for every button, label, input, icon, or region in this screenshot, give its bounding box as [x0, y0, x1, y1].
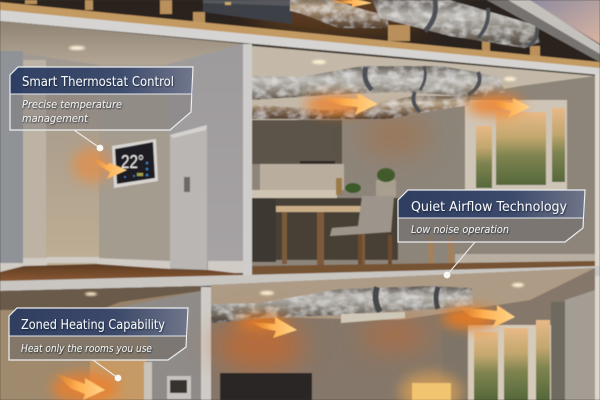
door frame [144, 362, 152, 400]
left wall [0, 51, 23, 273]
kitchen range hood shade [300, 161, 335, 164]
lower floor slab [0, 266, 600, 291]
floor [252, 261, 595, 276]
callout outline [9, 308, 188, 360]
callout: Smart Thermostat Control [10, 67, 193, 151]
duct band [420, 66, 425, 90]
door [170, 125, 207, 270]
duct [211, 286, 473, 323]
panel: lower left room [0, 286, 201, 400]
duct band [436, 287, 438, 309]
callout divider [9, 335, 187, 337]
callout header [9, 308, 188, 336]
dining area shade [276, 198, 398, 260]
leader line [447, 242, 475, 275]
thermostat indicators [124, 162, 148, 178]
duct band [468, 72, 480, 95]
column [23, 60, 46, 265]
callout description: Heat only the rooms you use [21, 343, 152, 355]
thermostat glow [72, 147, 112, 183]
floor deck: upper wood [0, 2, 600, 72]
callout description: Low noise operation [411, 224, 509, 236]
panel: upper right room [252, 46, 595, 276]
duct band [365, 67, 372, 90]
ceiling lights [260, 283, 524, 295]
duct band [425, 0, 436, 31]
attic joists [25, 0, 540, 56]
warm back wall [46, 65, 99, 265]
attic warm glow [250, 0, 430, 34]
baseboards [0, 257, 244, 273]
callout title: Zoned Heating Capability [21, 318, 165, 333]
callout outline [398, 190, 585, 242]
duct: upper run [252, 66, 505, 100]
leader line [93, 360, 118, 378]
arrow: lower duct airflow right [457, 305, 515, 328]
icon: potted plant [336, 168, 396, 197]
duct band [478, 8, 488, 38]
upper floor column [243, 44, 252, 276]
panel: lower right room [211, 268, 595, 400]
right wall [565, 290, 595, 400]
warm air plume [360, 319, 430, 351]
arrow: thermostat airflow [90, 155, 127, 179]
door warm panel [90, 360, 146, 400]
duct: lower run [252, 96, 470, 119]
arrow: upper duct airflow left [320, 93, 378, 115]
warm glow [467, 94, 523, 116]
kitchen backsplash [260, 164, 344, 190]
leader line [74, 130, 100, 148]
curtain right [551, 302, 565, 400]
callout body [10, 94, 193, 130]
callout title: Quiet Airflow Technology [411, 200, 567, 215]
ceiling light [85, 292, 97, 296]
leader dot [444, 272, 450, 278]
warm glow [305, 95, 365, 115]
warm glow [442, 307, 498, 329]
ceiling [0, 21, 243, 65]
kitchen wall cabinets [252, 120, 342, 164]
roof rafter shade [487, 0, 600, 62]
side wall [95, 291, 201, 400]
lower floor column [201, 287, 211, 400]
attic duct centre [290, 0, 388, 28]
upper beam [0, 10, 600, 75]
ceiling air vent [341, 312, 405, 323]
callout divider [10, 93, 192, 95]
callout body [9, 336, 188, 360]
callout header [398, 190, 585, 218]
curtain left [442, 330, 466, 400]
ceiling lights [312, 60, 516, 81]
thermostat temperature: 22° [121, 152, 144, 172]
warm textured wall [0, 310, 148, 400]
floor lamp [399, 372, 463, 400]
arrow: upper duct airflow right [490, 98, 530, 118]
attic duct far left [30, 0, 85, 6]
leader dot [97, 145, 103, 151]
warm air plume [215, 319, 305, 371]
callout description second line: management [22, 113, 89, 125]
duct band [528, 28, 537, 46]
sky [528, 0, 600, 44]
ceiling [252, 46, 595, 125]
warm glow [237, 314, 287, 330]
dining table [276, 206, 366, 268]
duct band [376, 287, 380, 312]
panel: upper left room [0, 21, 244, 282]
callout divider [398, 217, 584, 219]
icon: wall vent [167, 376, 191, 399]
warm wall glow [359, 113, 431, 157]
right exterior wall [595, 74, 600, 400]
arrow: lower duct airflow left [250, 317, 297, 338]
floor [0, 264, 243, 282]
ceiling [0, 286, 201, 312]
attic warm arrow [330, 0, 372, 7]
ceiling [211, 268, 595, 320]
callout: Quiet Airflow Technology [398, 190, 585, 278]
callout: Zoned Heating Capability [9, 308, 188, 381]
callout description: Precise temperature [22, 99, 122, 111]
duct band lower [413, 92, 420, 112]
arrow: zoned airflow [55, 373, 105, 400]
callout outline [10, 67, 193, 130]
kitchen lower cabinets [252, 198, 276, 262]
icon: thermostat [112, 139, 158, 188]
dining chair [330, 196, 454, 270]
attic air handler unit [203, 0, 292, 24]
attic duct main [372, 0, 540, 48]
callout body [398, 218, 585, 242]
side wall [165, 44, 243, 265]
roof rafter [487, 0, 600, 62]
attic duct left [100, 0, 160, 14]
grey back wall [99, 65, 171, 265]
callout title: Smart Thermostat Control [22, 75, 174, 90]
television [220, 373, 312, 400]
ceiling light [69, 46, 85, 50]
warm glow [51, 372, 119, 400]
kitchen counter [252, 190, 337, 198]
baseboard [455, 254, 595, 263]
callout header [10, 67, 193, 94]
window [465, 100, 567, 190]
panel: attic [0, 0, 600, 62]
leader dot [115, 375, 121, 381]
window [468, 320, 552, 400]
